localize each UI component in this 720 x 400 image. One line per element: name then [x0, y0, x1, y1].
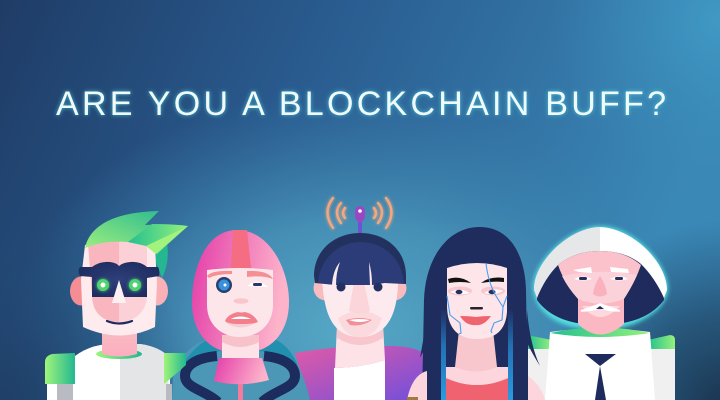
right sleeve	[648, 349, 675, 400]
green collar	[550, 328, 650, 337]
right shoulder pad	[648, 335, 675, 352]
face	[322, 280, 398, 337]
hair glow	[533, 226, 668, 330]
eyebrows	[207, 271, 232, 278]
right blue strand	[508, 310, 513, 400]
nose	[470, 307, 483, 310]
body skin	[407, 371, 545, 400]
left hair lock	[427, 330, 446, 400]
circuit lines	[447, 263, 507, 334]
neck	[455, 330, 497, 372]
nose	[593, 276, 607, 296]
collar ring	[96, 349, 142, 359]
teal jacket	[172, 340, 310, 400]
person 4: long dark hair woman	[407, 227, 545, 400]
eyes	[336, 282, 346, 292]
antenna	[355, 206, 365, 234]
tattoo accent	[407, 397, 418, 400]
ears	[70, 276, 92, 306]
moustache	[581, 304, 620, 311]
face	[558, 251, 641, 304]
neck	[222, 335, 259, 359]
glasses	[78, 262, 159, 297]
person 3: antenna figure	[295, 198, 430, 400]
shoulder pads	[45, 353, 75, 384]
eyes	[450, 290, 470, 294]
face	[207, 268, 273, 337]
jacket	[295, 346, 430, 400]
right hair lock	[508, 330, 528, 400]
top	[446, 378, 508, 400]
mouth	[346, 318, 372, 325]
jacket	[545, 328, 655, 400]
title: ARE YOU A BLOCKCHAIN BUFF?	[56, 85, 666, 123]
eyes	[574, 276, 592, 280]
brows	[448, 278, 471, 283]
neck	[102, 330, 137, 356]
face	[447, 263, 507, 339]
brows	[573, 267, 592, 273]
antenna signal waves	[328, 198, 392, 228]
mouth	[225, 312, 258, 328]
nose	[112, 280, 126, 303]
person 2: pink hair woman	[172, 230, 310, 400]
winking eye	[247, 282, 268, 287]
neck	[335, 325, 385, 368]
eye shadows	[448, 286, 472, 296]
right eye	[129, 279, 141, 291]
torso	[47, 344, 170, 400]
headset cable	[185, 356, 295, 400]
left eye	[97, 279, 109, 291]
nose	[349, 282, 370, 314]
neck	[578, 290, 624, 334]
pink hair	[192, 230, 289, 352]
person 1: green hair man	[45, 211, 188, 400]
dark interior	[537, 240, 664, 325]
cyber eye	[216, 277, 232, 293]
left blue strand	[441, 310, 446, 400]
collar	[214, 358, 269, 384]
ears	[314, 276, 338, 300]
hair back	[422, 227, 528, 400]
hair	[314, 233, 406, 285]
green hair	[85, 211, 188, 254]
nose	[234, 298, 248, 304]
face	[81, 241, 157, 336]
tie	[585, 354, 616, 400]
person 5 left sleeve	[527, 335, 552, 400]
lips	[460, 316, 491, 325]
hair back	[150, 240, 168, 278]
person 5: white-haired elder	[533, 226, 675, 400]
white shirt	[334, 360, 385, 400]
smile	[107, 321, 132, 324]
white hood	[534, 227, 600, 298]
